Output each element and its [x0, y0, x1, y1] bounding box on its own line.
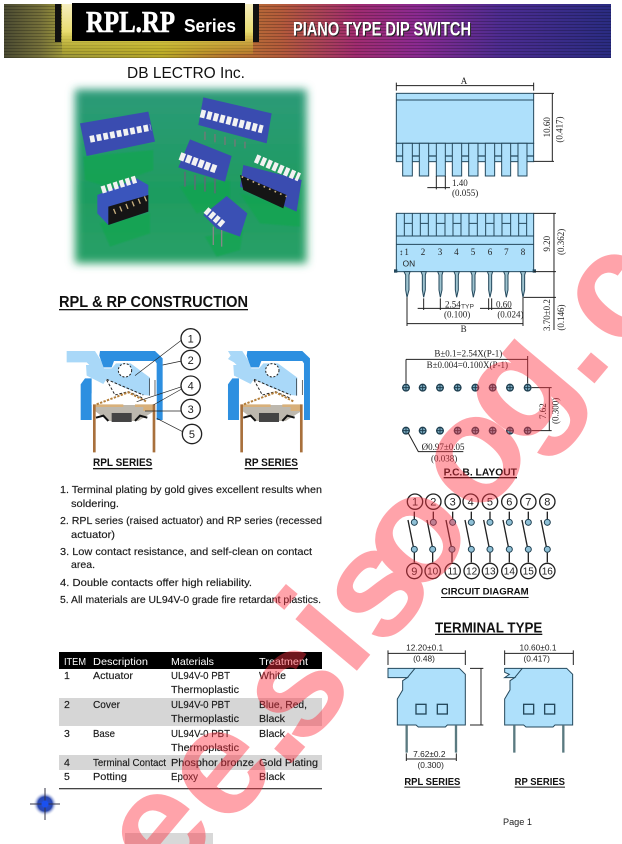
PCB layout drawing [402, 348, 560, 478]
RP dimensions: 10.60±0.1 [519, 643, 557, 653]
bottom terminals: 11 [447, 567, 458, 578]
table rows: UL94V-0 PBT [171, 670, 231, 682]
switch numbers [399, 247, 526, 269]
diagram: RPL cross-section [67, 351, 163, 452]
feature list: soldering. [71, 498, 119, 510]
product photo [75, 89, 307, 263]
feature list: 3. Low contact resistance, and self-clean on contact [60, 546, 312, 558]
side dimension drawing [394, 213, 566, 334]
table rows: Black [259, 771, 286, 783]
feature list: 1. Terminal plating by gold gives excellent results when [60, 484, 322, 496]
bottom terminals: 12 [466, 567, 478, 578]
callouts: 1 [188, 333, 194, 345]
feature list: 2. RPL series (raised actuator) and RP series (recessed [60, 515, 322, 527]
chip: 4 position small [203, 196, 247, 247]
switch numbers: 7 [504, 247, 509, 257]
bottom terminals [407, 563, 555, 579]
table rows: UL94V-0 PBT [171, 699, 231, 711]
dimension 10.60 [534, 93, 565, 161]
table rows: Thermoplastic [171, 684, 239, 696]
materials table [59, 652, 322, 789]
table rows: 5 [64, 771, 70, 783]
switches [408, 512, 550, 562]
table header: Treatment [259, 656, 308, 668]
hole diameter: Ø0.97±0.05 [422, 442, 465, 452]
table header: Description [93, 656, 148, 668]
dimension 7.62: (0.300) [550, 398, 560, 424]
dimension 9.20 and 3.70: (0.362) [556, 229, 566, 255]
table rows: 4 [64, 757, 70, 769]
table rows: Phosphor bronze [171, 757, 254, 769]
table rows: Terminal Contact [93, 757, 166, 769]
table rows: Cover [93, 699, 120, 711]
bottom terminals: 9 [411, 566, 417, 578]
table rows: Thermoplastic [171, 742, 239, 754]
formula dimension: B±0.1=2.54X(P-1) [434, 348, 502, 358]
dimension B: B [461, 324, 467, 334]
RP label: RP SERIES [515, 777, 565, 788]
table rows [64, 670, 318, 783]
feature list: actuator) [71, 529, 115, 541]
series title box: RPL.RP [86, 4, 175, 39]
top terminals: 4 [468, 497, 474, 509]
watermark: i [245, 558, 402, 700]
dimension 1.40: (0.055) [452, 188, 478, 198]
table rows: Actuator [93, 670, 134, 682]
heading: PCB layout: P.C.B. LAYOUT [444, 467, 517, 478]
diagram: RP cross-section [228, 351, 310, 452]
top terminals: 8 [544, 497, 550, 509]
table rows: 2 [64, 699, 70, 711]
table rows: 3 [64, 728, 70, 740]
RP terminal outline [505, 668, 573, 753]
watermark: o [314, 442, 504, 622]
label: RPL series: RPL SERIES [93, 457, 152, 469]
switch numbers: 5 [471, 247, 476, 257]
top terminals: 2 [430, 497, 436, 509]
banner subtitle: PIANO TYPE DIP SWITCH [294, 20, 472, 42]
header banner [4, 3, 611, 58]
pins [404, 272, 526, 297]
table rows: Blue, Red, [259, 699, 307, 711]
circuit diagram [407, 494, 555, 598]
formula dimension: B±0.004=0.100X(P-1) [427, 360, 508, 370]
RPL dimensions: 7.62±0.2 [413, 749, 446, 759]
dimension 2.54: (0.100) [444, 309, 470, 319]
terminal type section [388, 620, 573, 788]
feature list: area. [71, 559, 95, 571]
switch numbers: 4 [454, 247, 459, 257]
switch numbers: ON [403, 259, 415, 269]
RP dimensions: (0.417) [523, 654, 550, 664]
construction diagrams [67, 329, 310, 469]
callouts: 3 [188, 404, 194, 416]
bottom terminals: 14 [504, 567, 515, 578]
icon: blue crosshair logo [30, 788, 60, 820]
dimension A: A [461, 76, 468, 86]
table rows: Base [93, 728, 115, 740]
switch numbers: 3 [438, 247, 443, 257]
callouts [135, 329, 202, 444]
hole diameter: (0.038) [431, 454, 457, 464]
dimension 10.60: 10.60 [542, 117, 552, 137]
dimension 9.20 and 3.70: (0.146) [556, 304, 566, 331]
RPL dimensions [388, 643, 483, 770]
table rows: Black [259, 713, 286, 725]
dimension A [396, 76, 534, 91]
chip: 6 position centre [178, 139, 232, 193]
chip: 10 position top right [198, 97, 272, 148]
top terminals: 5 [487, 497, 493, 509]
watermark [62, 202, 622, 844]
top terminals: 7 [525, 497, 531, 509]
switch numbers: 1 [404, 247, 409, 257]
table header: Materials [171, 656, 214, 668]
bottom gray band [125, 833, 213, 844]
RPL dimensions: (0.48) [413, 654, 435, 664]
switch numbers: 6 [488, 247, 493, 257]
callouts: 4 [188, 381, 194, 393]
RP dimensions [505, 643, 573, 665]
feature list: 5. All materials are UL94V-0 grade fire retardant plastics. [60, 594, 321, 606]
watermark: s [279, 498, 463, 672]
watermark: . [180, 651, 337, 792]
watermark: o [374, 362, 564, 542]
callouts: 5 [189, 429, 195, 441]
table header [64, 656, 308, 668]
table rows: 1 [64, 670, 70, 682]
formula dimension [406, 348, 528, 383]
series title box: Series [184, 16, 236, 36]
switch numbers: 8 [521, 247, 526, 257]
chip: 6 position left [97, 178, 148, 225]
dimension B [407, 297, 523, 334]
table rows: Gold Plating [259, 757, 318, 769]
table header: ITEM [64, 656, 86, 668]
bottom terminals: 13 [484, 567, 496, 578]
chip: 10 position top left [80, 112, 155, 156]
dimension 0.60 [480, 298, 524, 319]
switch numbers: 2 [421, 247, 425, 257]
banner subtitle: PIANO TYPE DIP SWITCH [293, 18, 471, 40]
dimension 1.40 [427, 176, 478, 198]
table rows: Epoxy [171, 771, 199, 783]
top terminals: 6 [506, 497, 512, 509]
dimension 9.20 and 3.70: 3.70±0.2 [542, 299, 552, 331]
chip: 8 position right [240, 158, 302, 212]
top terminals [407, 494, 555, 509]
dimension 10.60: (0.417) [555, 116, 565, 143]
callouts: 2 [188, 355, 194, 367]
table rows: Thermoplastic [171, 713, 239, 725]
series title box [72, 3, 245, 41]
watermark: g [418, 294, 608, 474]
heading: circuit diagram: CIRCUIT DIAGRAM [441, 586, 529, 596]
RPL terminal outline [388, 668, 465, 753]
dimension 7.62: 7.62 [538, 403, 548, 419]
bottom terminals: 16 [542, 567, 553, 578]
dimension 7.62 [532, 388, 560, 431]
holes [402, 384, 531, 434]
dimension 9.20 and 3.70: 9.20 [542, 235, 552, 252]
page number: Page 1 [503, 817, 532, 828]
bottom terminals: 10 [427, 567, 439, 578]
RPL dimensions: 12.20±0.1 [406, 643, 444, 653]
table rows: White [259, 670, 286, 682]
label: RP series: RP SERIES [245, 457, 298, 469]
dimension 1.40: 1.40 [452, 178, 468, 188]
bottom terminals: 15 [523, 567, 534, 578]
heading: construction: RPL & RP CONSTRUCTION [59, 294, 248, 311]
feature list: 4. Double contacts offer high reliability. [60, 577, 252, 589]
heading: terminal type: TERMINAL TYPE [435, 620, 542, 636]
dimension 2.54: 2.54 [445, 299, 461, 309]
watermark: s [199, 598, 383, 772]
shadows [83, 150, 300, 257]
dimension 2.54 [418, 298, 474, 319]
RPL dimensions: (0.300) [417, 760, 444, 770]
dimension 0.60: 0.60 [496, 299, 512, 309]
table rows: Black [259, 728, 286, 740]
top terminals: 3 [450, 497, 456, 509]
table rows: UL94V-0 PBT [171, 728, 231, 740]
feature list [60, 484, 322, 606]
RPL label: RPL SERIES [404, 777, 460, 788]
table rows: Potting [93, 771, 127, 783]
top dimension drawing [396, 76, 565, 198]
dimension 9.20 and 3.70 [524, 213, 566, 331]
dimension 0.60: (0.024) [497, 309, 524, 319]
dimension 2.54: TYP [461, 304, 474, 311]
switch numbers: ↕ [399, 248, 403, 257]
company name: DB LECTRO Inc. [127, 65, 245, 82]
top terminals: 1 [412, 497, 418, 509]
hole diameter [408, 433, 465, 464]
